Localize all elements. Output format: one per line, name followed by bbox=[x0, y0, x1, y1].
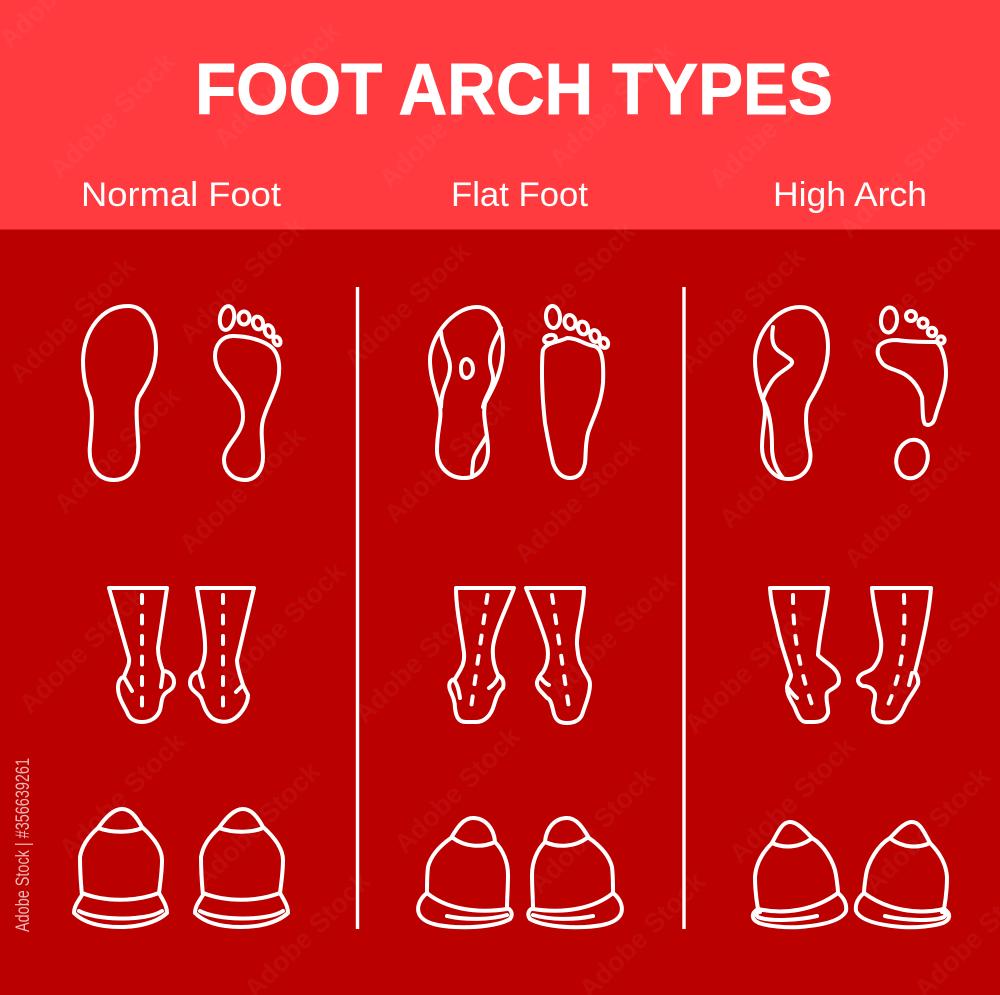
watermark pattern: Adobe Stock bbox=[388, 721, 527, 859]
icon: high arch right heel bbox=[856, 822, 949, 927]
icon: flat right heel bbox=[528, 818, 622, 927]
watermark pattern: Adobe Stock bbox=[703, 56, 842, 194]
watermark pattern: Adobe Stock bbox=[208, 16, 347, 154]
icon: high arch footprint bbox=[878, 307, 946, 482]
heading: flat foot: Flat Foot bbox=[451, 176, 589, 214]
watermark pattern: Adobe Stock bbox=[523, 761, 662, 899]
icon: normal footprint bbox=[215, 305, 282, 480]
watermark pattern: Adobe Stock bbox=[173, 421, 312, 559]
watermark pattern: Adobe Stock bbox=[713, 396, 852, 534]
watermark pattern: Adobe Stock bbox=[348, 591, 487, 729]
watermark pattern: Adobe Stock bbox=[673, 241, 812, 379]
watermark pattern: Adobe Stock bbox=[543, 36, 682, 174]
watermark pattern: Adobe Stock bbox=[833, 106, 972, 244]
icon: high arch left heel bbox=[753, 822, 846, 927]
watermark pattern: Adobe Stock bbox=[858, 761, 997, 899]
icon: normal right heel bbox=[195, 809, 288, 927]
divider: normal and flat columns bbox=[356, 287, 359, 929]
icon: high arch right ankle bbox=[858, 588, 931, 722]
header band bbox=[0, 0, 1000, 230]
watermark pattern: Adobe Stock bbox=[373, 56, 512, 194]
heading: normal foot: Normal Foot bbox=[81, 176, 282, 214]
icon: flat left heel bbox=[418, 818, 512, 927]
watermark pattern: Adobe Stock bbox=[378, 391, 517, 529]
icon: flat footprint bbox=[542, 305, 610, 478]
watermark pattern: Adobe Stock bbox=[678, 601, 817, 739]
watermark pattern: Adobe Stock bbox=[188, 756, 327, 894]
watermark pattern: Adobe Stock bbox=[843, 226, 982, 364]
watermark pattern: Adobe Stock bbox=[43, 46, 182, 184]
icon: normal left ankle bbox=[109, 588, 174, 722]
icon: normal foot sole bbox=[83, 306, 156, 480]
watermark pattern: Adobe Stock bbox=[543, 566, 682, 704]
watermark pattern: Adobe Stock bbox=[338, 236, 477, 374]
watermark pattern: Adobe Stock bbox=[3, 251, 142, 389]
icon: normal left heel bbox=[74, 809, 167, 927]
watermark pattern: Adobe Stock bbox=[173, 211, 312, 349]
title: FOOT ARCH TYPES bbox=[195, 50, 833, 130]
side credit text: Adobe Stock | #356639261 bbox=[13, 758, 34, 932]
watermark pattern: Adobe Stock bbox=[13, 581, 152, 719]
heading: high arch: High Arch bbox=[773, 176, 927, 214]
watermark pattern: Adobe Stock bbox=[213, 556, 352, 694]
watermark pattern: Adobe Stock bbox=[508, 431, 647, 569]
icon: flat foot sole bbox=[430, 307, 503, 478]
watermark pattern: Adobe Stock bbox=[723, 731, 862, 869]
watermark pattern: Adobe Stock bbox=[48, 381, 187, 519]
icon: high arch sole bbox=[755, 307, 828, 479]
icon: normal right ankle bbox=[190, 588, 254, 722]
watermark pattern: Adobe Stock bbox=[503, 216, 642, 354]
icon: high arch left ankle bbox=[770, 588, 839, 722]
icon: flat left ankle bbox=[449, 588, 514, 722]
icon: flat right ankle bbox=[526, 588, 590, 723]
watermark pattern: Adobe Stock bbox=[53, 726, 192, 864]
divider: flat and high columns bbox=[682, 287, 686, 929]
watermark pattern: Adobe Stock bbox=[838, 436, 977, 574]
